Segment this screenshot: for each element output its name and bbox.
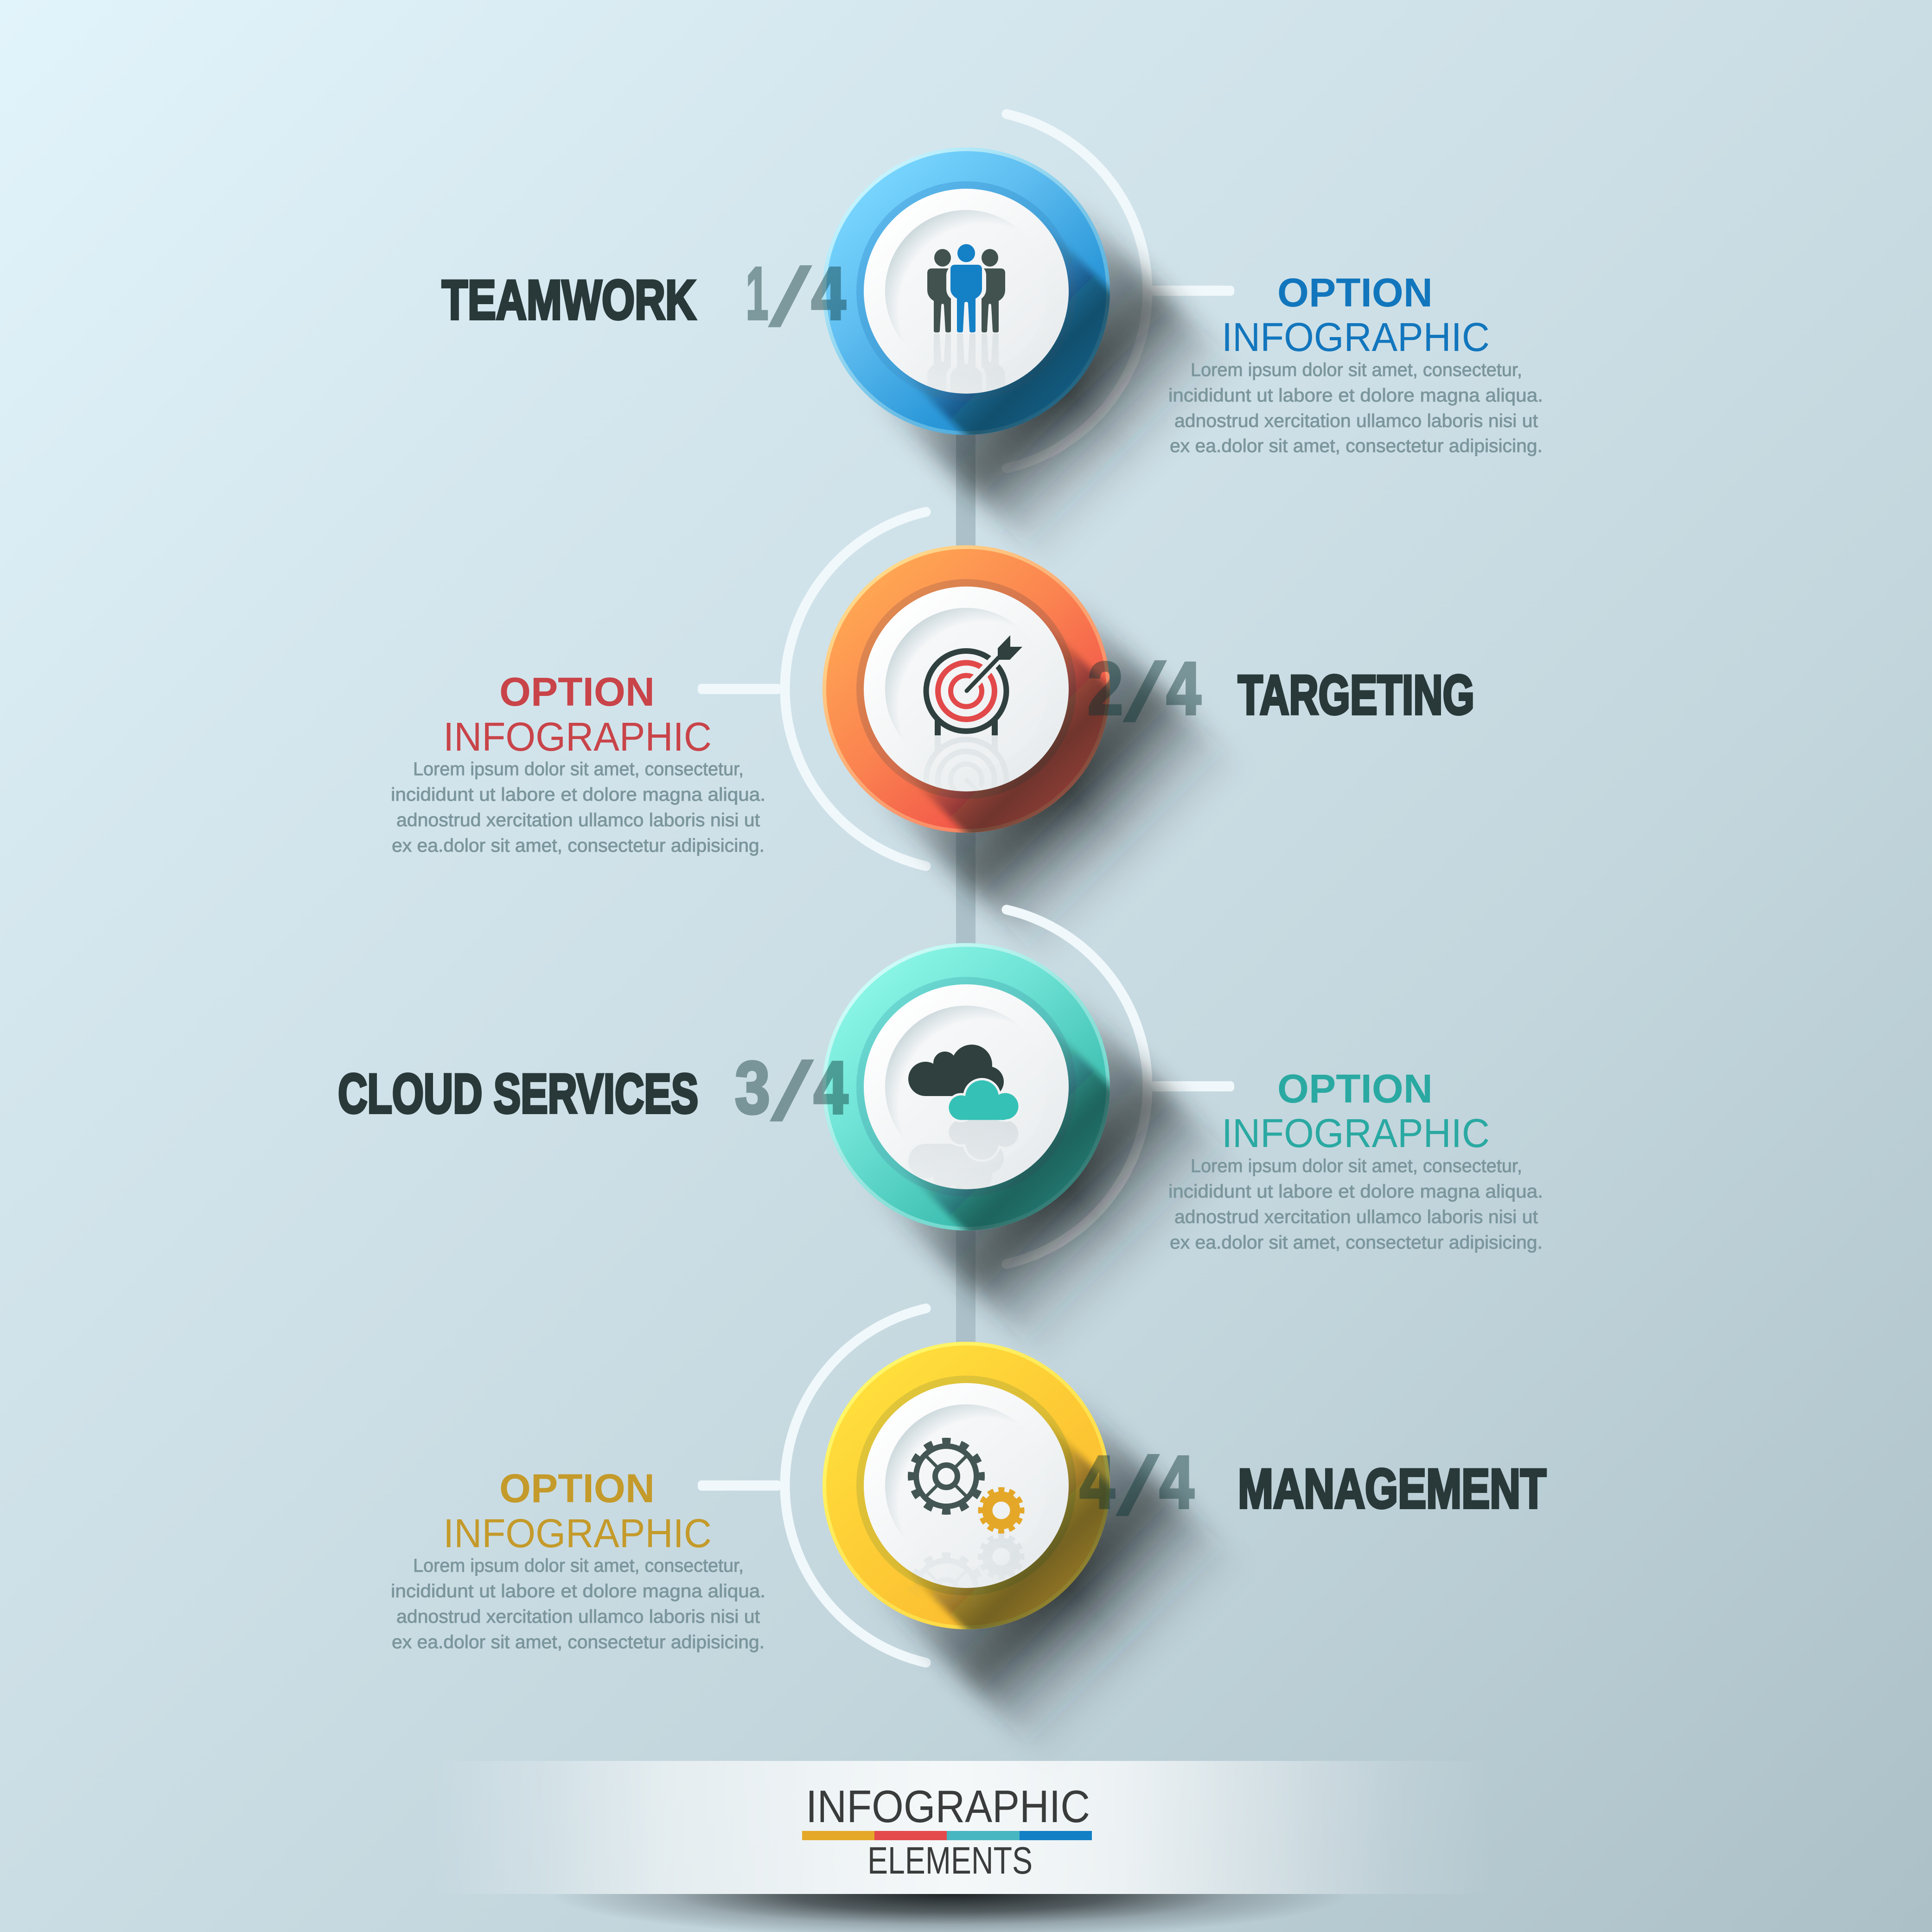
icon reflection: target (926, 735, 1022, 835)
badge (823, 147, 1110, 435)
icon reflection: gears (911, 1536, 1022, 1626)
arc and stem (698, 512, 926, 866)
long shadow (861, 1381, 1245, 1764)
icon: team (927, 244, 1005, 332)
title: management: MANAGEMENT (1238, 1458, 1546, 1520)
counter 4/4: 4 (1160, 1441, 1194, 1524)
badge (823, 1342, 1170, 1689)
banner subheading: ELEMENTS (867, 1839, 1033, 1882)
icon reflection: team (927, 333, 1005, 380)
text block: option 1: incididunt ut labore et dolore magna aliqua. (1168, 385, 1543, 406)
banner shadow (464, 1894, 1437, 1932)
badge (823, 943, 1170, 1290)
text block: option 3: incididunt ut labore et dolore magna aliqua. (1168, 1181, 1543, 1202)
title: targeting: TARGETING (1238, 664, 1474, 726)
text block: option 2: Lorem ipsum dolor sit amet, consectetur, (413, 759, 744, 779)
step 4: management (698, 1308, 1245, 1764)
counter 2/4: 2 (1088, 647, 1123, 730)
text block: option 4: OPTION (499, 1466, 655, 1511)
long shadow (861, 982, 1245, 1365)
text block: option 4: adnostrud xercitation ullamco laboris nisi ut (396, 1607, 760, 1627)
badge (823, 545, 1170, 893)
text block: option 4: incididunt ut labore et dolore magna aliqua. (391, 1581, 765, 1601)
text block: option 1: OPTION (1277, 270, 1433, 315)
vertical connector (956, 417, 976, 1498)
counter 2/4: / (1122, 645, 1167, 740)
step 3: cloud services (823, 910, 1245, 1365)
text block: option 3: Lorem ipsum dolor sit amet, consectetur, (1191, 1156, 1522, 1176)
text block: option 1: adnostrud xercitation ullamco laboris nisi ut (1174, 411, 1538, 431)
text block: option 1 (1168, 270, 1543, 456)
counter 2/4 (1088, 645, 1201, 740)
banner strip (429, 1761, 1495, 1894)
counter 4/4: 4 (1080, 1441, 1115, 1524)
long shadow (879, 204, 1228, 553)
text block: option 1: Lorem ipsum dolor sit amet, consectetur, (1191, 360, 1522, 380)
arc and stem (1007, 114, 1234, 468)
title: cloud services: CLOUD SERVICES (338, 1063, 698, 1125)
text block: option 2: OPTION (499, 670, 655, 714)
text block: option 3 (1168, 1066, 1543, 1253)
counter 3/4: 4 (814, 1046, 848, 1129)
counter 3/4: 3 (735, 1046, 770, 1129)
text block: option 2: INFOGRAPHIC (443, 714, 712, 759)
text block: option 2: incididunt ut labore et dolore magna aliqua. (391, 784, 765, 805)
icon: clouds (908, 1045, 1018, 1120)
counter 1/4: / (768, 250, 813, 344)
counter 3/4 (735, 1044, 848, 1139)
counter 2/4: 4 (1167, 647, 1201, 730)
counter 1/4 (746, 250, 846, 344)
icon reflection: clouds (908, 1120, 1018, 1195)
text block: option 3: OPTION (1277, 1066, 1433, 1111)
text block: option 4 (391, 1466, 765, 1652)
banner heading: INFOGRAPHIC (806, 1781, 1090, 1832)
arc and stem (1007, 910, 1234, 1264)
text block: option 1: INFOGRAPHIC (1222, 315, 1490, 360)
step 2: targeting (698, 512, 1245, 968)
icon: gears (911, 1441, 1022, 1531)
text block: option 3: INFOGRAPHIC (1222, 1111, 1490, 1156)
text block: option 4: INFOGRAPHIC (443, 1511, 712, 1556)
bottom banner (429, 1761, 1495, 1932)
text block: option 2: ex ea.dolor sit amet, consectetur adipisicing. (392, 835, 765, 856)
counter 1/4: 4 (811, 252, 846, 335)
arc and stem (698, 1308, 926, 1663)
colour bar (802, 1831, 1092, 1840)
counter 1/4: 1 (746, 252, 768, 335)
text block: option 3: adnostrud xercitation ullamco laboris nisi ut (1174, 1207, 1538, 1227)
counter 3/4: / (770, 1044, 815, 1139)
text block: option 3: ex ea.dolor sit amet, consectetur adipisicing. (1170, 1232, 1543, 1253)
step 1: teamwork (823, 114, 1245, 570)
counter 4/4 (1080, 1439, 1194, 1533)
counter 4/4: / (1116, 1439, 1160, 1533)
text block: option 1: ex ea.dolor sit amet, consectetur adipisicing. (1170, 436, 1543, 456)
icon: target with arrow (926, 635, 1022, 735)
text block: option 4: Lorem ipsum dolor sit amet, consectetur, (413, 1556, 744, 1576)
long shadow (861, 584, 1245, 968)
text block: option 2 (391, 670, 765, 856)
text block: option 4: ex ea.dolor sit amet, consectetur adipisicing. (392, 1632, 765, 1652)
title: teamwork: TEAMWORK (442, 269, 696, 331)
text block: option 2: adnostrud xercitation ullamco laboris nisi ut (396, 810, 760, 830)
